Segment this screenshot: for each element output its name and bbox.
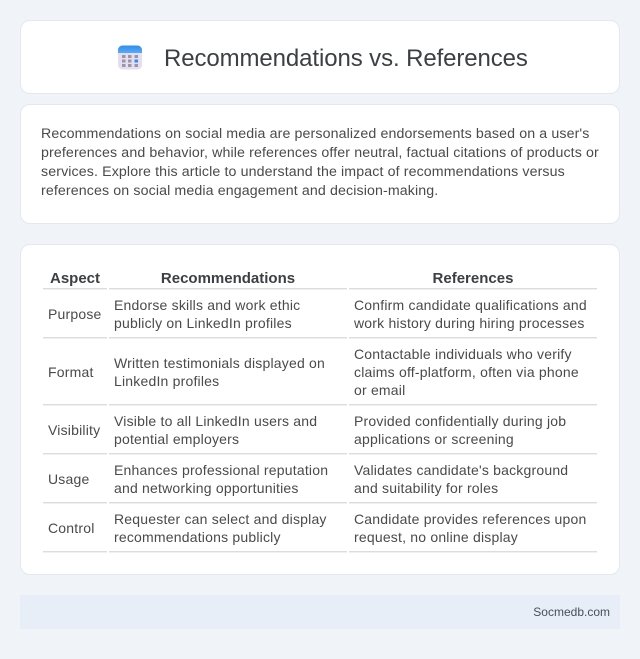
comparison table: Control xyxy=(48,520,95,536)
comparison table: References xyxy=(433,270,513,287)
icon: calendar xyxy=(118,46,142,70)
comparison table: Aspect xyxy=(50,270,100,287)
intro text xyxy=(41,126,599,199)
comparison table: Validates candidate's background xyxy=(354,462,568,478)
comparison table: and networking opportunities xyxy=(114,480,299,496)
intro text: Recommendations on social media are personalized endorsements based on a user's xyxy=(41,126,589,142)
comparison table: Format xyxy=(48,364,94,380)
comparison table: Contactable individuals who verify xyxy=(354,346,572,362)
comparison table: request, no online display xyxy=(354,529,518,545)
comparison table: publicly on LinkedIn profiles xyxy=(114,315,292,331)
comparison table: Visible to all LinkedIn users and xyxy=(114,413,317,429)
comparison table: Provided confidentially during job xyxy=(354,413,566,429)
panel: comparison table xyxy=(20,244,620,575)
comparison table: Purpose xyxy=(48,306,102,322)
comparison table: and suitability for roles xyxy=(354,480,498,496)
intro text: references on social media engagement and decision-making. xyxy=(41,183,438,199)
comparison table: Candidate provides references upon xyxy=(354,511,587,527)
comparison table: claims off-platform, often via phone xyxy=(354,364,579,380)
footer source: Socmedb.com xyxy=(533,605,610,619)
comparison table: work history during hiring processes xyxy=(354,315,585,331)
comparison table: Written testimonials displayed on xyxy=(114,355,325,371)
title: Recommendations vs. References xyxy=(164,45,528,72)
footer bar xyxy=(20,595,620,629)
comparison table: Confirm candidate qualifications and xyxy=(354,297,587,313)
comparison table: LinkedIn profiles xyxy=(114,373,219,389)
panel: title card xyxy=(20,20,620,94)
comparison table: Visibility xyxy=(48,422,100,438)
comparison table: applications or screening xyxy=(354,431,514,447)
comparison table: recommendations publicly xyxy=(114,529,281,545)
comparison table: potential employers xyxy=(114,431,239,447)
comparison table: Requester can select and display xyxy=(114,511,327,527)
comparison table: Usage xyxy=(48,471,89,487)
intro text: preferences and behavior, while references offer neutral, factual citations of products or xyxy=(41,145,599,161)
comparison table: Endorse skills and work ethic xyxy=(114,297,300,313)
comparison table xyxy=(43,270,597,553)
panel: intro text xyxy=(20,104,620,224)
comparison table: or email xyxy=(354,382,405,398)
comparison table: Enhances professional reputation xyxy=(114,462,328,478)
intro text: services. Explore this article to understand the impact of recommendations versus xyxy=(41,164,565,180)
comparison table: Recommendations xyxy=(161,270,295,287)
